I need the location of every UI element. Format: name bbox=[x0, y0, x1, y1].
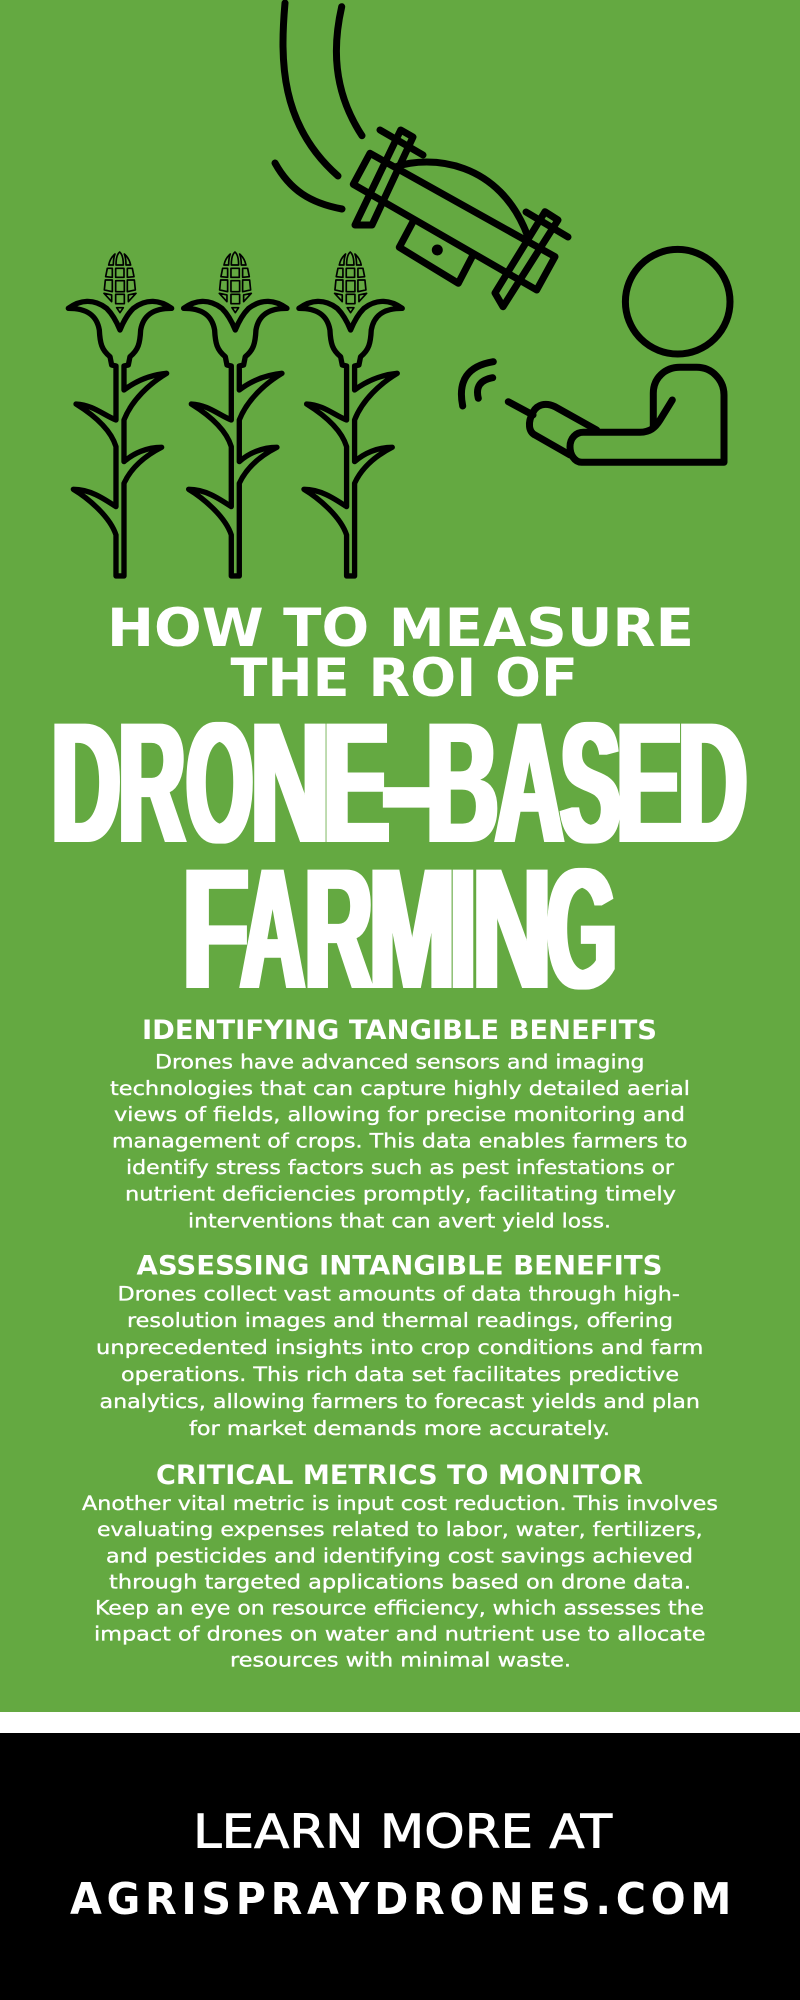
title: large heading: I bbox=[450, 833, 476, 1025]
section: identifying tangible benefits bbox=[110, 1015, 690, 1232]
heading: IDENTIFYING TANGIBLE BENEFITS bbox=[142, 1015, 657, 1046]
body text bbox=[82, 1492, 718, 1672]
title: large heading: M bbox=[369, 833, 455, 1025]
title: large heading: O bbox=[186, 687, 253, 879]
title: small heading: HOW TO MEASURE bbox=[107, 598, 694, 659]
title: small heading bbox=[107, 598, 694, 709]
icon: corn plants bbox=[68, 252, 402, 576]
body text: technologies that can capture highly detailed aerial bbox=[110, 1077, 690, 1100]
title: large heading: S bbox=[560, 687, 620, 879]
body text: unprecedented insights into crop conditions and farm bbox=[96, 1336, 703, 1359]
title: large heading: N bbox=[250, 687, 330, 879]
body text: through targeted applications based on drone data. bbox=[109, 1571, 691, 1594]
body text: Drones have advanced sensors and imaging bbox=[155, 1050, 644, 1073]
white divider band bbox=[0, 1712, 800, 1733]
icon: corn plant 3 bbox=[299, 252, 402, 576]
body text: Drones collect vast amounts of data through high- bbox=[118, 1283, 680, 1306]
title: large heading bbox=[52, 687, 747, 1025]
icon: drone bbox=[353, 130, 568, 307]
footer panel bbox=[0, 1733, 800, 2000]
icon: corn plant 1 bbox=[68, 252, 172, 576]
icon: person with remote controller bbox=[461, 249, 730, 462]
title: large heading: D bbox=[52, 687, 120, 879]
title: large heading: E bbox=[616, 687, 682, 879]
footer: call to action: AGRISPRAYDRONES.COM bbox=[70, 1874, 736, 1925]
body text: management of crops. This data enables farmers to bbox=[112, 1130, 688, 1153]
section: critical metrics to monitor bbox=[82, 1460, 718, 1672]
title: large heading: F bbox=[183, 833, 249, 1025]
body text: for market demands more accurately. bbox=[189, 1417, 610, 1440]
body text: views of fields, allowing for precise monitoring and bbox=[114, 1103, 685, 1126]
icon: flight swooshes bbox=[275, 3, 362, 209]
section: assessing intangible benefits bbox=[96, 1251, 703, 1440]
body text: resources with minimal waste. bbox=[230, 1649, 571, 1672]
title: large heading: E bbox=[323, 687, 389, 879]
title: large heading: G bbox=[547, 833, 617, 1025]
body text bbox=[110, 1050, 690, 1232]
body text: evaluating expenses related to labor, water, fertilizers, bbox=[97, 1518, 703, 1541]
footer: call to action bbox=[70, 1805, 736, 1925]
body text: resolution images and thermal readings, offering bbox=[127, 1309, 673, 1332]
body text: interventions that can avert yield loss. bbox=[188, 1209, 611, 1232]
body text: identify stress factors such as pest infestations or bbox=[126, 1156, 675, 1179]
title: large heading: R bbox=[118, 687, 185, 879]
body text: nutrient deficiencies promptly, facilitating timely bbox=[125, 1183, 676, 1206]
title: large heading: R bbox=[305, 833, 372, 1025]
icon: corn plant 2 bbox=[184, 252, 287, 576]
body text: Keep an eye on resource efficiency, which assesses the bbox=[95, 1597, 704, 1620]
title: large heading: N bbox=[472, 833, 552, 1025]
body text: impact of drones on water and nutrient use to allocate bbox=[94, 1623, 706, 1646]
body text: Another vital metric is input cost reduction. This involves bbox=[82, 1492, 718, 1515]
body text: analytics, allowing farmers to forecast yields and plan bbox=[100, 1390, 700, 1413]
title: large heading: A bbox=[495, 687, 564, 879]
title: large heading: B bbox=[426, 687, 498, 879]
body text: and pesticides and identifying cost savings achieved bbox=[106, 1544, 693, 1567]
title: small heading: THE ROI OF bbox=[230, 648, 578, 709]
title: large heading: - bbox=[380, 687, 433, 879]
footer: call to action: LEARN MORE AT bbox=[193, 1805, 613, 1859]
body text: operations. This rich data set facilitates predictive bbox=[121, 1363, 679, 1386]
heading: ASSESSING INTANGIBLE BENEFITS bbox=[136, 1251, 662, 1282]
heading: CRITICAL METRICS TO MONITOR bbox=[156, 1460, 643, 1491]
body text bbox=[96, 1283, 703, 1440]
title: large heading: D bbox=[678, 687, 747, 879]
title: large heading: A bbox=[240, 833, 305, 1025]
